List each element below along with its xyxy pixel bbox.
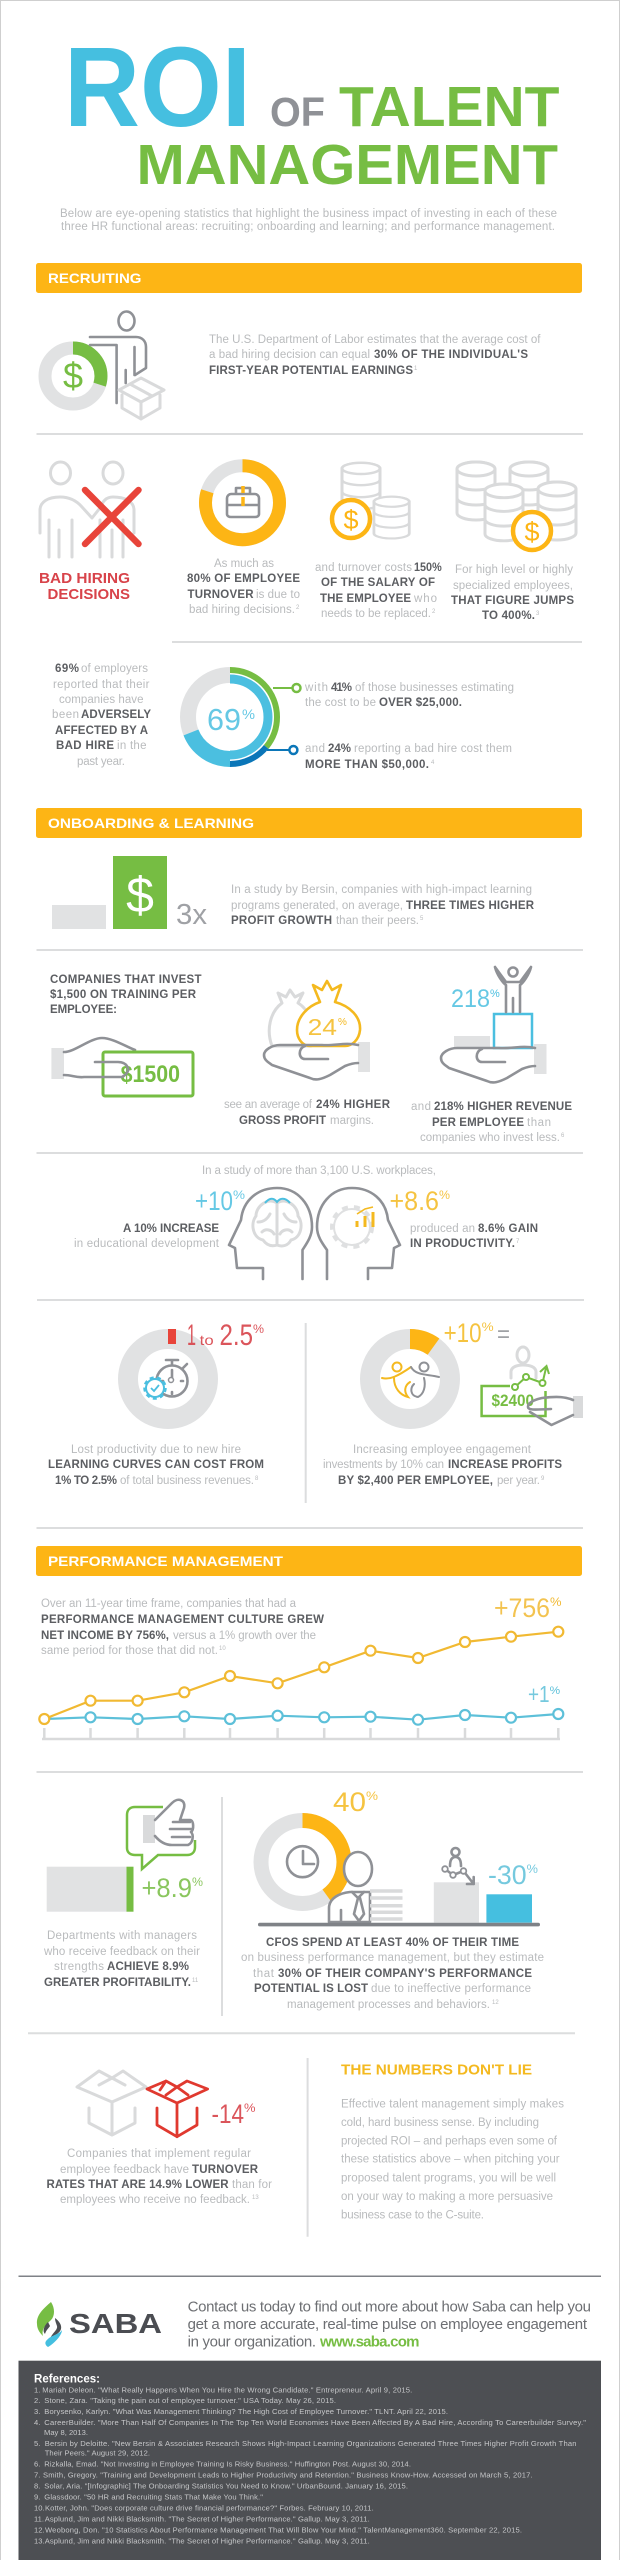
heading: bad hiring decisions [39, 570, 130, 603]
text: CFOs spend 40 percent: 12 [492, 2000, 499, 2006]
text: cost of a bad hire: 30% OF THE INDIVIDUAL'S [374, 349, 528, 361]
text: three times higher profit growth: In a study by Bersin, companies with high-impact learning [231, 884, 532, 896]
bar icon: 3x profit growth: $ [126, 867, 154, 923]
icon: hand holding money bags 24 percent: 24 [308, 1014, 337, 1040]
title: MANAGEMENT [136, 133, 558, 197]
text: CFOs spend 40 percent: due to ineffective performance [371, 1983, 531, 1995]
text: greater profitability: GREATER PROFITABILITY. [44, 1977, 191, 1989]
text: 69 percent of employers: in the [117, 740, 146, 752]
icon: coin stacks 150 percent [332, 463, 409, 538]
stat: plus 10 percent: % [233, 1188, 245, 1202]
heading: bad hiring decisions: BAD HIRING [39, 570, 130, 587]
donut: 69 percent with callouts: % [242, 706, 255, 722]
text: 80 percent of turnover [187, 558, 300, 616]
panel: references: Rizkalla, Emad. "Not Investing in Employee Training Is Risky Business." Huffington Post. August 30, 2014. [44, 2460, 411, 2469]
panel: references: 13. [34, 2536, 45, 2545]
text: greater profitability: who receive feedback on their [43, 1946, 200, 1958]
text: figure jumps to 400 percent: TO 400%. [482, 610, 535, 622]
icon: two heads with brain and gear [229, 1188, 400, 1279]
text: turnover rates lower: than for [232, 2179, 272, 2191]
text: three times higher profit growth: 5 [420, 916, 424, 922]
stat: plus 8.6 percent: +8.6 [390, 1186, 439, 1216]
stat: 1 to 2.5 percent: % [253, 1322, 264, 1336]
text: turnover rates lower: TURNOVER [192, 2164, 259, 2176]
text: increase profits by 2400: per year. [497, 1475, 540, 1487]
text: 69 percent of employers: 69% [55, 663, 79, 675]
text: 41 percent over 25000 [304, 682, 514, 709]
text: contact call to action: in your organization. [188, 2334, 316, 2351]
text: closing paragraph: proposed talent programs, you will be well [341, 2173, 556, 2185]
panel: references: Weobong, Don. "10 Statistics About Performance Management That Will Blow Your Mind." TalentManagement360. September 22, 2015. [45, 2525, 522, 2534]
panel: references: 9. [34, 2493, 40, 2502]
panel: references: 1. [34, 2385, 40, 2394]
icon: profit bill 2400 with growth arrow: $2400 [492, 1391, 534, 1410]
text: net income by 756 percent: same period for those that did not. [41, 1645, 218, 1657]
stat: 1 to 2.5 percent: 2.5 [220, 1319, 253, 1352]
text: closing paragraph: cold, hard business sense. By including [341, 2117, 539, 2129]
icon: turnover boxes minus 14 percent: % [244, 2101, 256, 2115]
text: CFOs spend 40 percent: on business performance management, but they estimate [241, 1952, 544, 1964]
stat: plus 10 percent: +10 [195, 1186, 233, 1216]
logo: Saba [37, 2302, 162, 2347]
panel: references: Bersin by Deloitte. "New Bersin & Associates Research Shows High-Impact Learning Organizations Generated Three Times Higher Profit Growth Than [45, 2439, 577, 2448]
text: 69 percent of employers: BAD HIRE [56, 740, 114, 752]
text: three times higher profit growth: programs generated, on average, [231, 900, 403, 912]
text: study of 3100 workplaces: In a study of more than 3,100 U.S. workplaces, [202, 1165, 436, 1177]
icon: bad hiring handshake with red X [40, 462, 138, 557]
panel: references: Asplund, Jim and Nikki Blacksmith. "The Secret of Higher Performance." Gallup. May 3, 2011. [45, 2536, 370, 2545]
icon: coin stacks 400 percent: $ [524, 517, 540, 547]
text: 80 percent of turnover: 80% OF EMPLOYEE [187, 573, 300, 585]
text: learning curves cost: 1% TO 2.5% [55, 1475, 117, 1487]
text: 150 percent of salary: 150% [414, 562, 442, 574]
text: 218 percent higher revenue: 6 [561, 1133, 565, 1139]
text: turnover rates lower: employee feedback have [60, 2164, 189, 2176]
text: 24 percent over 50000: 4 [431, 760, 435, 766]
icon: coin stacks 400 percent [457, 462, 576, 550]
text: 150 percent of salary: needs to be replaced. [321, 608, 431, 620]
panel: references: 2. [34, 2396, 40, 2405]
stat: 1 to 2.5 percent [187, 1319, 264, 1352]
donut: CFO time 40 percent with person: 40 [333, 1787, 366, 1817]
text: net income by 756 percent: versus a 1% growth over the [173, 1630, 316, 1642]
donut: CFO time 40 percent with person: % [366, 1789, 378, 1803]
panel: references: 6. [34, 2460, 40, 2469]
icon: hand holding 1500 bill [51, 1038, 193, 1096]
text: CFOs spend 40 percent: POTENTIAL IS LOST [254, 1983, 368, 1995]
text: 41 percent over 25000: the cost to be [305, 697, 376, 709]
intro text [60, 208, 557, 233]
text: 218 percent higher revenue: 218% HIGHER REVENUE [434, 1101, 572, 1113]
text: 24 percent higher gross profit: margins. [330, 1115, 374, 1127]
text: closing paragraph [341, 2098, 564, 2222]
text: increase profits by 2400: investments by 10% can [323, 1459, 444, 1471]
text: companies that invest 1500: $1,500 ON TRAINING PER [50, 989, 197, 1001]
text: turnover rates lower: employees who receive no feedback. [60, 2194, 250, 2206]
icon: person on box with hand 218 percent: 218 [451, 985, 490, 1013]
panel: references: Solar, Aria. "[Infographic] The Onboarding Statistics You Need to Know." UrbanBound. January 16, 2015. [44, 2482, 408, 2491]
text: 80 percent of turnover: 2 [296, 605, 300, 611]
bar icon: minus 30 percent potential: % [527, 1862, 538, 1876]
donut: CFO time 40 percent with person [261, 1787, 402, 1922]
text: closing paragraph: these statistics above – when pitching your [341, 2154, 560, 2166]
icon: turnover boxes minus 14 percent: -14 [212, 2099, 244, 2129]
panel: references: 5. [34, 2439, 40, 2448]
panel: references: Asplund, Jim and Nikki Blacksmith. "The Secret of Higher Performance." Gallup. May 3, 2011. [45, 2514, 370, 2523]
text: 150 percent of salary: who [413, 593, 437, 605]
text: greater profitability: ACHIEVE 8.9% [107, 1961, 189, 1973]
text: 10 percent increase: A 10% INCREASE [123, 1223, 219, 1235]
text: CFOs spend 40 percent: management processes and behaviors. [287, 1999, 490, 2011]
text: 8.6 percent gain in productivity: 8.6% GAIN [478, 1223, 538, 1235]
icon: person on box with hand 218 percent [441, 967, 546, 1082]
panel: references: Borysenko, Karlyn. "What Was Management Thinking? The High Cost of Employee Turnover." TLNT. April 22, 2015. [44, 2407, 448, 2416]
panel: references: Stone, Zara. "Taking the pain out of employee turnover." USA Today. May 26, 2015. [44, 2396, 336, 2405]
text: net income by 756 percent: 10 [219, 1646, 226, 1652]
section heading: recruiting: RECRUITING [48, 270, 142, 286]
panel: references: Kotter, John. "Does corporate culture drive financial performance?" Forbes. February 10, 2011. [45, 2504, 374, 2513]
text: cost of a bad hire: a bad hiring decision can equal [209, 349, 370, 361]
text: 218 percent higher revenue: than [527, 1117, 551, 1129]
icon: person on box with hand 218 percent: % [490, 988, 500, 1000]
text: contact call to action: Contact us today to find out more about how Saba can help you [188, 2299, 591, 2316]
text: 8.6 percent gain in productivity: produced an [410, 1223, 475, 1235]
title: ROI [64, 24, 251, 150]
icon: feedback bubble with thumb up [127, 1800, 195, 1869]
panel: references: CareerBuilder. "More Than Half Of Companies In The Top Ten World Economies Have Been Affected By A Bad Hire, According To Careerbuilder Survey." [44, 2418, 586, 2427]
text: 150 percent of salary: THE EMPLOYEE [320, 593, 411, 605]
icon: hand holding money bags 24 percent: % [338, 1017, 347, 1028]
title: OF [270, 89, 325, 135]
text: 24 percent higher gross profit: GROSS PROFIT [239, 1115, 326, 1127]
text: learning curves cost: of total business revenues. [120, 1475, 254, 1487]
text: figure jumps to 400 percent: THAT FIGURE JUMPS [451, 595, 574, 607]
donut: 80 percent turnover [206, 466, 280, 540]
text: 24 percent over 50000: MORE THAN $50,000. [305, 759, 429, 771]
text: 69 percent of employers: ADVERSELY [81, 709, 151, 721]
text: 8.6 percent gain in productivity: 7 [516, 1239, 520, 1245]
text: closing paragraph: Effective talent management simply makes [341, 2098, 564, 2110]
icon: coin stacks 150 percent: $ [343, 505, 359, 535]
bar icon: 3x profit growth [52, 856, 207, 931]
stat: 1 to 2.5 percent: to [200, 1332, 214, 1348]
text: 41 percent over 25000: OVER $25,000. [379, 697, 462, 709]
text: three times higher profit growth: PROFIT GROWTH [231, 915, 332, 927]
text: 150 percent of salary: OF THE SALARY OF [321, 577, 435, 589]
stat: plus 10 percent equals: +10 [444, 1318, 482, 1348]
text: cost of a bad hire: 1 [414, 366, 418, 372]
stat: plus 10 percent equals [444, 1318, 510, 1348]
text: 10 percent increase: in educational development [74, 1238, 220, 1250]
bar icon: plus 8.9 percent: +8.9 [142, 1873, 192, 1903]
panel: references: 8. [34, 2482, 40, 2491]
bar icon: minus 30 percent potential: -30 [488, 1860, 527, 1890]
text: 69 percent of employers: AFFECTED BY A [55, 725, 148, 737]
text: increase profits by 2400: Increasing employee engagement [353, 1444, 532, 1456]
line chart: net income growth: +756 [494, 1593, 550, 1623]
intro text: Below are eye-opening statistics that highlight the business impact of investing in each of these [60, 208, 557, 220]
text: 24 percent higher gross profit: 24% HIGHER [316, 1099, 391, 1111]
icon: profit bill 2400 with growth arrow [482, 1347, 583, 1425]
text: 69 percent of employers: past year. [77, 756, 125, 768]
panel: references: References: [34, 2371, 100, 2385]
text: 218 percent higher revenue: PER EMPLOYEE [432, 1117, 524, 1129]
donut: learning curve cost [128, 1329, 208, 1419]
bar icon: minus 30 percent potential [258, 1848, 540, 1926]
text: CFOs spend 40 percent: CFOS SPEND AT LEAST 40% OF THEIR TIME [266, 1937, 519, 1949]
text: contact call to action: get a more accurate, real-time pulse on employee engagement [188, 2316, 588, 2333]
text: greater profitability: strengths [54, 1961, 104, 1973]
panel: references: 4. [34, 2418, 40, 2427]
line chart: net income growth: % [550, 1685, 560, 1697]
text: net income by 756 percent [41, 1598, 324, 1657]
text: figure jumps to 400 percent: specialized employees, [453, 580, 573, 592]
text: turnover rates lower: 13 [252, 2195, 259, 2201]
text: cost of a bad hire [209, 334, 541, 377]
text: 24 percent over 50000: and [305, 743, 325, 755]
text: 150 percent of salary: 2 [432, 609, 436, 615]
panel: references: 10. [34, 2504, 45, 2513]
stat: plus 8.6 percent: % [439, 1188, 450, 1202]
heading: bad hiring decisions: DECISIONS [48, 586, 130, 603]
text: 41 percent over 25000: of those businesses estimating [355, 682, 514, 694]
text: 24 percent over 50000 [305, 743, 512, 771]
text: 69 percent of employers [52, 663, 151, 768]
title: TALENT [339, 75, 560, 139]
text: CFOs spend 40 percent [241, 1937, 544, 2011]
text: 80 percent of turnover: TURNOVER [188, 589, 254, 601]
text: increase profits by 2400: INCREASE PROFITS [448, 1459, 562, 1471]
icon: person with cost donut and box: $ [63, 355, 83, 396]
text: closing paragraph: business case to the C-suite. [341, 2210, 484, 2222]
text: net income by 756 percent: PERFORMANCE MANAGEMENT CULTURE GREW [41, 1614, 324, 1626]
donut: engagement investment [370, 1339, 450, 1419]
stat: plus 10 percent equals: = [497, 1321, 510, 1348]
donut: 69 percent with callouts [183, 670, 300, 764]
bar icon: plus 8.9 percent [47, 1867, 203, 1912]
text: 8.6 percent gain in productivity [410, 1223, 538, 1250]
text: 41 percent over 25000: with [304, 682, 328, 694]
donut: 69 percent with callouts: 69 [207, 702, 241, 737]
text: 24 percent over 50000: reporting a bad hire cost them [354, 743, 512, 755]
text: 80 percent of turnover: is due to [256, 589, 300, 601]
panel: references: Smith, Gregory. "Training and Development Leads to Higher Productivity and Retention." Business Know-How. Accessed on March 5, 2017. [43, 2471, 533, 2480]
line chart: net income growth: % [550, 1595, 562, 1609]
text: companies that invest 1500: EMPLOYEE: [50, 1004, 117, 1016]
stat: 1 to 2.5 percent: 1 [187, 1319, 196, 1352]
text: cost of a bad hire: FIRST-YEAR POTENTIAL EARNINGS [209, 365, 413, 377]
text: 80 percent of turnover: bad hiring decisions. [189, 604, 295, 616]
text: three times higher profit growth: THREE TIMES HIGHER [406, 900, 535, 912]
text: 150 percent of salary: and turnover costs [315, 562, 412, 574]
icon: hand holding 1500 bill: $1500 [121, 1061, 180, 1088]
section heading: onboarding and learning: ONBOARDING & LEARNING [48, 815, 254, 831]
text: 80 percent of turnover: As much as [214, 558, 274, 570]
text: contact call to action: www.saba.com [319, 2334, 420, 2351]
panel: references [18, 2361, 601, 2560]
text: closing paragraph: on your way to making a more persuasive [341, 2191, 553, 2203]
text: net income by 756 percent: NET INCOME BY 756%, [41, 1630, 169, 1642]
text: companies that invest 1500: COMPANIES THAT INVEST [50, 974, 202, 986]
panel: references: 7. [34, 2471, 40, 2480]
text: learning curves cost [48, 1444, 264, 1487]
text: 218 percent higher revenue [411, 1101, 572, 1144]
section heading: onboarding and learning [36, 808, 582, 838]
text: figure jumps to 400 percent [451, 564, 574, 622]
bar icon: 3x profit growth: 3x [176, 899, 207, 931]
text: 150 percent of salary [315, 562, 442, 620]
panel: references: 11. [34, 2514, 44, 2523]
text: increase profits by 2400 [323, 1444, 562, 1487]
section heading: recruiting [36, 263, 582, 293]
text: turnover rates lower: Companies that implement regular [67, 2148, 251, 2160]
text: learning curves cost: 8 [255, 1476, 259, 1482]
logo: Saba: SABA [69, 2308, 162, 2339]
text: greater profitability: 11 [192, 1978, 199, 1984]
text: 69 percent of employers: reported that their [53, 679, 150, 691]
text: 24 percent over 50000: 24% [328, 743, 351, 755]
text: CFOs spend 40 percent: 30% OF THEIR COMPANY'S PERFORMANCE [278, 1968, 532, 1980]
text: three times higher profit growth [231, 884, 535, 927]
text: companies that invest 1500 [50, 974, 202, 1016]
stat: plus 10 percent equals: % [482, 1320, 494, 1334]
panel: references: 3. [34, 2407, 40, 2416]
text: cost of a bad hire: The U.S. Department of Labor estimates that the average cost of [209, 334, 541, 346]
text: net income by 756 percent: Over an 11-year time frame, companies that had a [41, 1598, 297, 1610]
text: greater profitability: Departments with managers [47, 1930, 197, 1942]
panel: references: 12. [34, 2525, 45, 2534]
text: CFOs spend 40 percent: that [253, 1968, 275, 1980]
text: increase profits by 2400: BY $2,400 PER EMPLOYEE, [338, 1475, 493, 1487]
text: 24 percent higher gross profit [224, 1099, 391, 1127]
panel: references: Their Peers." August 29, 2012. [45, 2449, 150, 2458]
text: learning curves cost: Lost productivity due to new hire [71, 1444, 241, 1456]
text: increase profits by 2400: 9 [541, 1476, 545, 1482]
text: turnover rates lower [46, 2148, 272, 2206]
line chart: net income growth: +1 [528, 1681, 550, 1707]
text: turnover rates lower: RATES THAT ARE 14.9% LOWER [46, 2179, 229, 2191]
text: 218 percent higher revenue: and [411, 1101, 431, 1113]
text: 10 percent increase [74, 1223, 220, 1250]
bar icon: plus 8.9 percent: % [192, 1875, 203, 1889]
text: 218 percent higher revenue: companies who invest less. [420, 1132, 560, 1144]
text: 8.6 percent gain in productivity: IN PRODUCTIVITY. [410, 1238, 515, 1250]
icon: turnover boxes minus 14 percent [77, 2071, 256, 2137]
text: greater profitability [43, 1930, 200, 1989]
heading: the numbers don't lie: THE NUMBERS DON'T LIE [341, 2061, 532, 2078]
text: contact call to action [188, 2299, 591, 2351]
text: three times higher profit growth: than their peers. [336, 915, 419, 927]
text: 69 percent of employers: of employers [81, 663, 148, 675]
text: 24 percent higher gross profit: see an average of [224, 1099, 313, 1111]
text: 69 percent of employers: companies have [59, 694, 144, 706]
text: closing paragraph: projected ROI – and perhaps even some of [341, 2135, 558, 2147]
section heading: performance management [36, 1546, 582, 1576]
text: 41 percent over 25000: 41% [331, 682, 352, 694]
icon: hand holding money bags 24 percent [264, 981, 370, 1079]
section heading: performance management: PERFORMANCE MANAGEMENT [48, 1553, 283, 1569]
intro text: three HR functional areas: recruiting; onboarding and learning; and performance management. [61, 221, 555, 233]
title [64, 24, 560, 197]
text: figure jumps to 400 percent: 3 [536, 611, 540, 617]
text: figure jumps to 400 percent: For high level or highly [455, 564, 573, 576]
panel: references: Mariah Deleon. "What Really Happens When You Hire the Wrong Candidate." Entrepreneur. April 9, 2015. [42, 2385, 412, 2394]
icon: person with cost donut and box [45, 312, 164, 419]
panel: references: Glassdoor. "50 HR and Recruiting Stats That Make You Think." [44, 2493, 263, 2502]
line chart: net income growth [39, 1593, 563, 1739]
text: learning curves cost: LEARNING CURVES CAN COST FROM [48, 1459, 264, 1471]
panel: references: May 8, 2013. [44, 2428, 88, 2437]
text: 69 percent of employers: been [52, 709, 79, 721]
